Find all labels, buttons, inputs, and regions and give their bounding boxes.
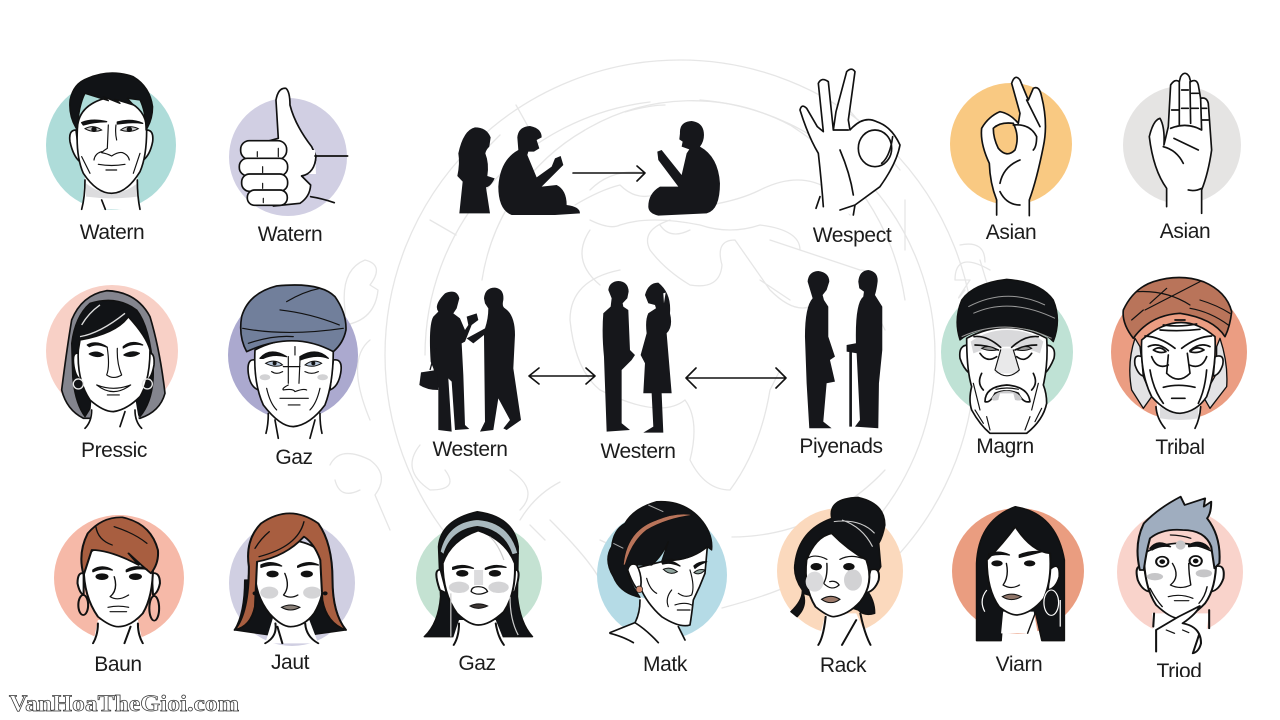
blush circle — [1117, 509, 1243, 635]
coral oval — [54, 515, 184, 641]
panel: Watern thumbs up — [229, 88, 348, 246]
panel: Tribal elder — [1111, 277, 1247, 459]
label: Watern — [80, 221, 144, 244]
icon: short brown hair woman with hoops — [78, 517, 160, 643]
green oval — [416, 522, 542, 634]
label: Gaz — [458, 652, 496, 675]
label: Magrn — [976, 435, 1034, 458]
panel: Western couple standing — [603, 281, 672, 433]
silhouette: seated woman and man — [457, 126, 580, 215]
orange circle — [950, 83, 1072, 205]
label: Rack — [820, 654, 867, 677]
pink circle — [46, 285, 178, 417]
icon: long black hair woman — [977, 507, 1064, 641]
arrow: double left-right — [529, 368, 595, 384]
panel: Baun woman — [54, 515, 184, 676]
peach oval — [777, 508, 903, 634]
background globe with world map outlines — [330, 60, 992, 608]
panel: Western couple with bag — [419, 288, 521, 432]
icon: thumbs up — [239, 88, 348, 206]
panel: seated conversation silhouettes — [457, 121, 720, 216]
silhouette: two people with cane — [805, 270, 882, 428]
blue circle — [597, 510, 727, 640]
panel: Pressic woman face — [46, 285, 178, 462]
label: Baun — [94, 653, 142, 676]
label: Piyenads: Piyenads — [799, 435, 883, 458]
label: Western left: Western — [432, 438, 508, 461]
silhouette: seated man facing left — [648, 121, 720, 216]
label: Asian — [986, 221, 1036, 244]
purple circle — [228, 290, 358, 420]
label: Matk — [643, 653, 688, 676]
panel: Rack woman with bun — [777, 497, 903, 677]
icon: grey-haired man hand on chin — [1137, 497, 1224, 653]
panel: Watern man face — [46, 73, 176, 244]
mint circle — [941, 286, 1073, 418]
panel: Viarn woman — [952, 507, 1084, 676]
icon: bearded elder with black cap — [957, 279, 1057, 433]
teal circle — [46, 80, 176, 210]
label: Wespect — [813, 224, 892, 247]
panel: Gaz woman with headband — [416, 512, 542, 675]
label: Watern — [258, 223, 322, 246]
arrow: right — [573, 166, 645, 181]
panel: Piyenads pair with cane — [805, 270, 882, 428]
label: Gaz — [275, 446, 313, 469]
panel: Gaz man in blue turban — [228, 285, 358, 469]
silhouette: woman with handbag and man — [419, 288, 521, 432]
icon: woman three-quarter profile with headband — [608, 502, 712, 643]
icon: OK hand line drawing — [800, 69, 900, 215]
icon: elder with brown turban — [1123, 277, 1232, 428]
panel: Matk woman in profile — [597, 502, 727, 676]
icon: OK hand — [981, 77, 1045, 216]
icon: woman with hair bun — [791, 497, 885, 645]
orange oval — [952, 508, 1084, 634]
icon: stern man with turban — [241, 285, 346, 438]
salmon circle — [1111, 284, 1247, 420]
panel: Asian open palm — [1123, 73, 1241, 243]
panel: Jaut woman — [229, 513, 355, 674]
panel: OK gesture Wespect — [800, 69, 900, 247]
icon: woman with bob hair and hoop earrings — [62, 291, 165, 428]
clipped bottom of Triod label — [1150, 677, 1210, 685]
lavender circle — [229, 98, 347, 216]
icon: woman with grey headband — [424, 512, 532, 645]
label: Viarn — [996, 653, 1042, 676]
icon: long brown hair woman — [235, 513, 346, 643]
panel: Magrn bearded elder — [941, 279, 1073, 458]
label: Pressic — [81, 439, 147, 462]
arrow: double left-right long — [686, 368, 786, 388]
label: Jaut — [271, 651, 310, 674]
panel: Triod thoughtful man — [1117, 497, 1243, 683]
label: Triod — [1156, 660, 1202, 683]
label: Asian — [1160, 220, 1210, 243]
silhouette: man and woman face to face — [603, 281, 672, 433]
icon: raised palm — [1149, 73, 1212, 213]
panel: Asian OK gesture — [950, 77, 1072, 244]
label: Tribal — [1155, 436, 1205, 459]
lavender oval — [229, 520, 355, 646]
watermark: VanHoaTheGioi.com — [9, 691, 239, 716]
grey circle — [1123, 86, 1241, 204]
label: Western center: Western — [600, 440, 676, 463]
icon: man with short black hair — [70, 73, 153, 209]
